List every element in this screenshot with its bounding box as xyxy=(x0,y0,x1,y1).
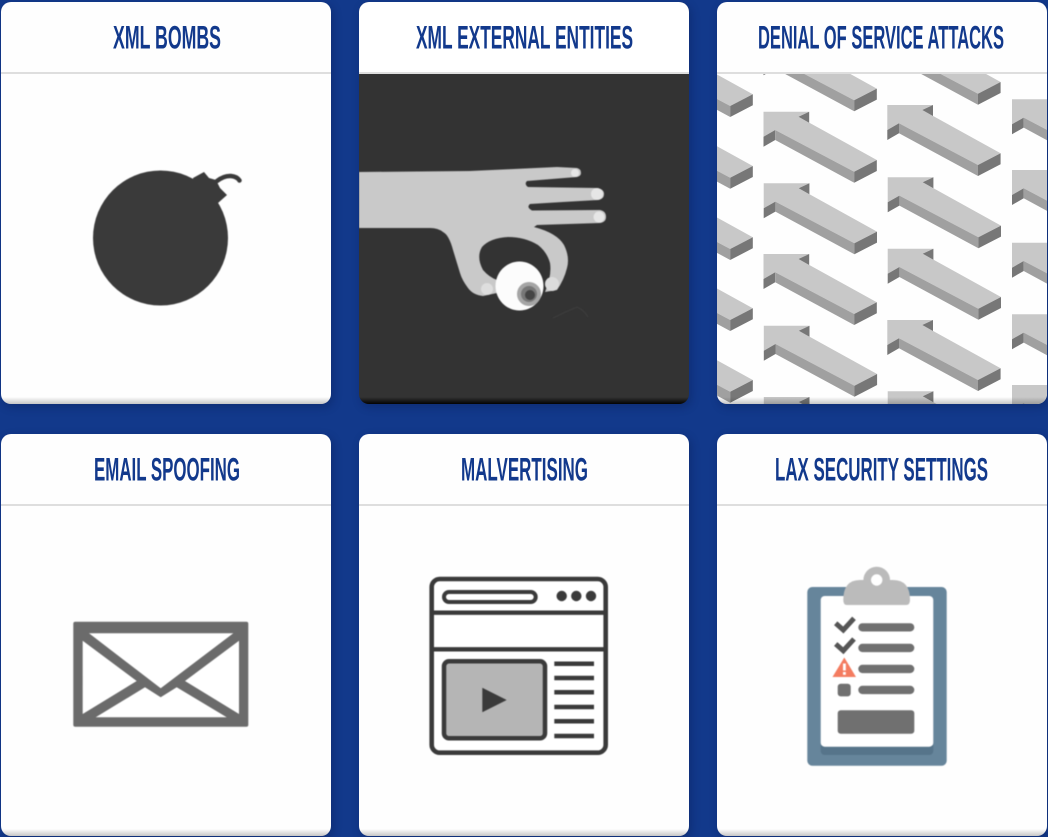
illustration: hand holding an eyeball xyxy=(359,167,606,318)
panel: XML external entities xyxy=(359,2,689,404)
panel: XML bombs xyxy=(1,2,331,404)
icon: clipboard checklist xyxy=(807,567,947,766)
pattern: isometric arrows xyxy=(717,74,1047,404)
panel: denial of service attacks xyxy=(717,2,1047,404)
panel: malvertising xyxy=(359,434,689,836)
panel: lax security settings xyxy=(717,434,1047,836)
icon: browser window with video ad xyxy=(432,579,606,753)
icon: bomb xyxy=(93,170,240,306)
heading: XML bombs: XML BOMBS xyxy=(113,20,221,56)
panel: email spoofing xyxy=(1,434,331,836)
icon: eyeball xyxy=(496,262,544,310)
icon: envelope xyxy=(73,622,248,727)
icon: warning triangle xyxy=(832,658,856,677)
